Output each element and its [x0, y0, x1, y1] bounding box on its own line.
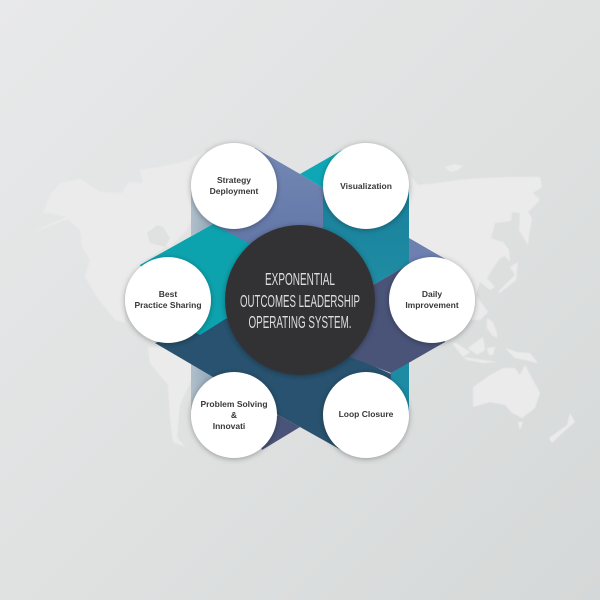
node: visualization: Visualization	[340, 181, 392, 191]
node: daily improvement: Improvement	[405, 300, 459, 310]
node: loop closure	[323, 372, 409, 458]
north america	[33, 150, 215, 323]
south america	[148, 347, 192, 447]
australia	[473, 365, 540, 418]
segment: navy bottom	[155, 318, 391, 455]
left pale strip lower	[191, 363, 225, 410]
title: OPERATING SYSTEM.	[248, 312, 352, 332]
new guinea	[505, 348, 538, 363]
segment: teal small top	[300, 150, 360, 190]
world map	[33, 150, 575, 447]
node: problem solving and innovati	[191, 372, 277, 458]
node: problem solving and innovati: &	[231, 410, 237, 420]
sulawesi	[487, 347, 495, 355]
borneo	[468, 337, 485, 355]
node: best practice sharing: Best	[159, 289, 177, 299]
sakhalin and japan	[498, 262, 518, 293]
node: strategy deployment: Strategy	[217, 175, 251, 185]
node: daily improvement: Daily	[422, 289, 442, 299]
title: EXPONENTIAL	[265, 269, 335, 289]
title: OUTCOMES LEADERSHIP	[240, 291, 360, 311]
node: best practice sharing: Practice Sharing	[134, 300, 202, 310]
node: loop closure: Loop Closure	[339, 409, 394, 419]
node: strategy deployment: Deployment	[210, 186, 258, 196]
svalbard	[445, 164, 463, 172]
left pale strip upper	[191, 190, 225, 236]
node: problem solving and innovati: Problem Solving	[200, 399, 268, 409]
center circle	[225, 225, 375, 375]
asia	[405, 172, 542, 320]
node: daily improvement	[389, 257, 475, 343]
sumatra malay	[452, 343, 470, 357]
node: visualization	[323, 143, 409, 229]
node: strategy deployment	[191, 143, 277, 229]
title	[240, 269, 360, 332]
new zealand	[549, 413, 575, 443]
node: best practice sharing	[125, 257, 211, 343]
segment: teal left	[140, 224, 250, 335]
tasmania	[518, 422, 523, 430]
segment: dark purple bottom	[255, 415, 300, 450]
segment: periwinkle right	[409, 238, 447, 280]
java	[463, 357, 498, 363]
segment: dark purple right	[340, 264, 445, 373]
segment: teal upper right	[323, 186, 409, 300]
philippines	[487, 318, 497, 338]
hexagon segments	[140, 148, 447, 455]
hudson bay	[147, 225, 170, 247]
node: problem solving and innovati: Innovati	[213, 421, 245, 431]
segment: periwinkle upper	[213, 148, 323, 262]
segment: teal bottom right	[360, 362, 409, 415]
sliver coast	[502, 240, 510, 262]
